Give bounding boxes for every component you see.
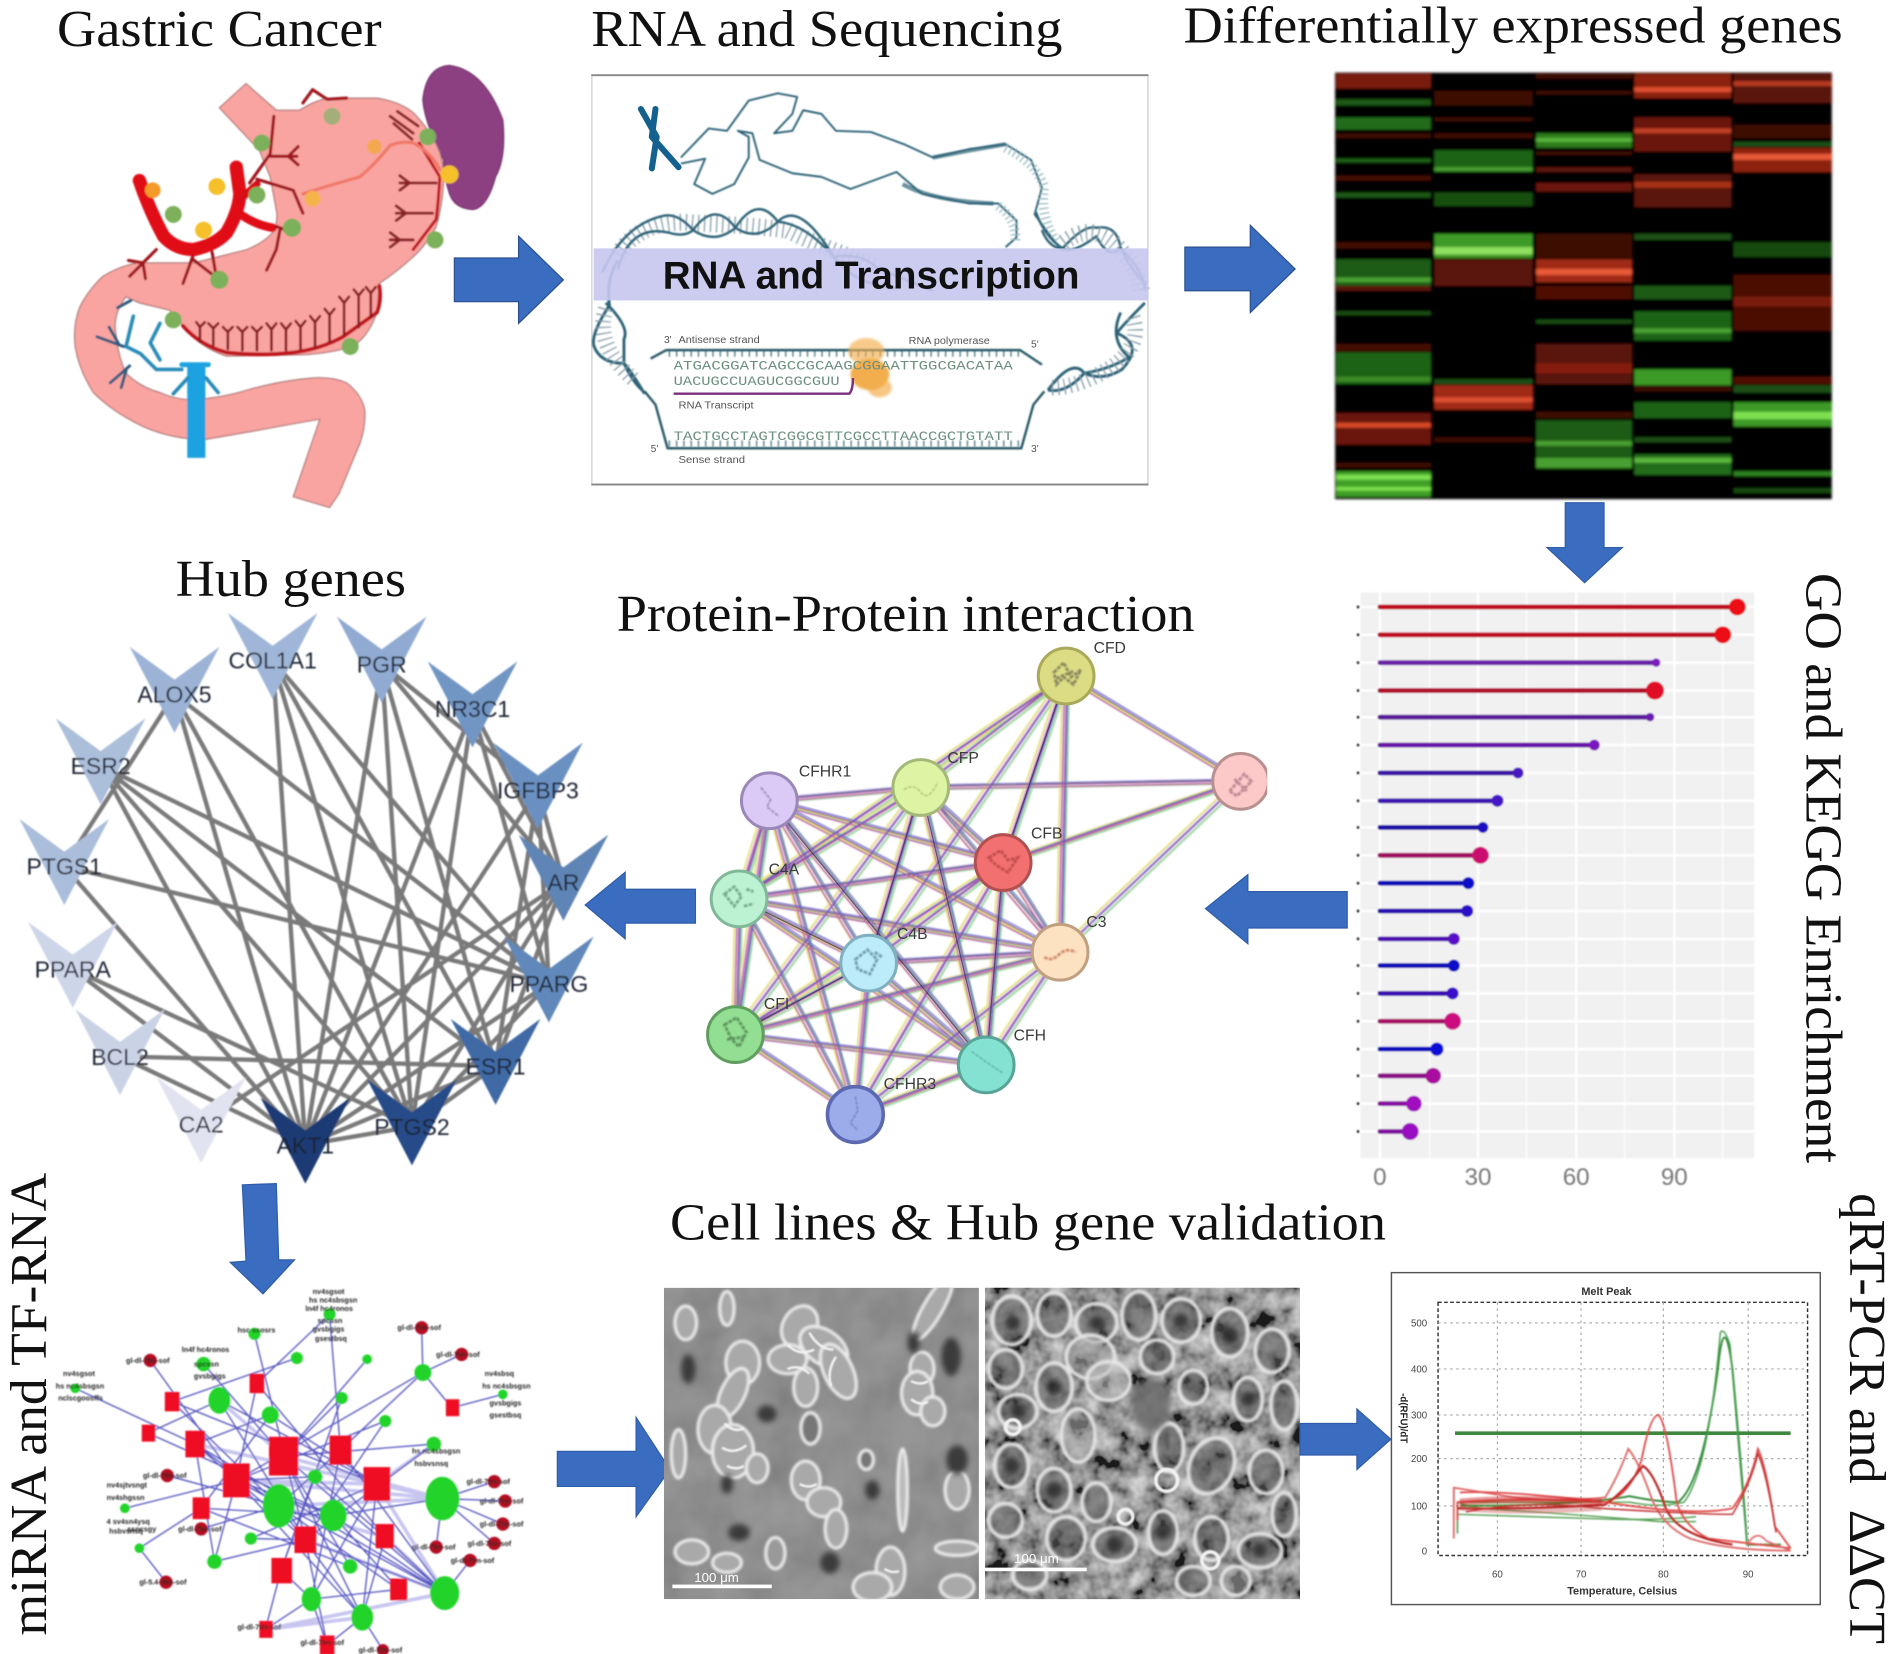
y axis labels: 400: [1411, 1365, 1428, 1376]
x axis labels: 60: [1492, 1569, 1503, 1580]
node labels: CFB: [1031, 825, 1063, 842]
node labels: gvsbgigs: [489, 1398, 521, 1407]
scale bar: 100 μm: [1014, 1551, 1059, 1566]
x axis labels: [1492, 1569, 1754, 1597]
y axis labels: [1398, 1319, 1428, 1557]
cells: [671, 1272, 979, 1602]
icon: red arteries: [128, 90, 440, 354]
node labels: nv4sbsq: [485, 1369, 514, 1378]
node labels: gvsbgigs: [194, 1372, 226, 1381]
node labels: hs nc4sbsgsn: [412, 1447, 460, 1456]
node labels: nv4sjtvsngt: [107, 1481, 148, 1490]
node labels: nv4sgsot: [313, 1287, 345, 1296]
chart: protein-protein interaction network: [708, 640, 1284, 1142]
node glyphs: [725, 663, 1251, 1130]
chart: miRNA and TF-RNA network: [56, 1287, 531, 1654]
title: miRNA and TF-RNA: miRNA and TF-RNA: [1, 1172, 58, 1635]
arrow: RNA to heatmap: [1185, 225, 1295, 313]
icon: chromosome: [641, 109, 678, 168]
node: CFP: [893, 760, 949, 815]
axis labels: 90: [1661, 1164, 1688, 1191]
y axis labels: -d(RFU)/dT: [1398, 1393, 1409, 1443]
arrow: stomach to RNA: [454, 236, 563, 323]
chart: hub gene network: [19, 613, 608, 1184]
hub gene labels: BCL2: [91, 1044, 149, 1070]
text: strand annotations: UACUGCCUAGUCGGCGUU: [674, 374, 840, 389]
node labels: gsestbsq: [315, 1334, 347, 1343]
node labels: hs nc4sbsgsn: [482, 1381, 531, 1390]
axis labels: [1373, 1164, 1688, 1191]
axis labels: 30: [1465, 1164, 1492, 1191]
node labels: C3: [1086, 914, 1107, 931]
panel: cell line micrograph right: [985, 1288, 1300, 1599]
arrow: cell lines to qRT-PCR: [1300, 1409, 1391, 1469]
node labels: [56, 1287, 531, 1654]
x axis labels: 70: [1576, 1569, 1587, 1580]
panel: heatmap: [1335, 73, 1832, 499]
x axis labels: 80: [1658, 1569, 1669, 1580]
arrow: miRNA network to cell lines: [557, 1417, 670, 1517]
node labels: gl-dl-7lm-sof: [412, 1542, 456, 1551]
text: strand annotations: Sense strand: [678, 455, 745, 466]
hub gene labels: IGFBP3: [497, 777, 579, 803]
node labels: gl-dl-7lm-sof: [143, 1471, 187, 1480]
hub gene labels: PPARG: [509, 971, 588, 997]
node labels: gl-dl-7lm-sof: [480, 1496, 524, 1505]
node labels: nclscgoosffs: [58, 1393, 103, 1402]
y axis labels: 500: [1411, 1319, 1428, 1330]
node labels: spcssn: [317, 1316, 342, 1325]
x axis labels: 90: [1743, 1569, 1754, 1580]
hub gene labels: PGR: [357, 651, 407, 677]
text: strand annotations: RNA polymerase: [909, 336, 990, 347]
axis labels: 0: [1373, 1164, 1387, 1191]
node: C3: [1032, 924, 1088, 980]
bright internal texture: [722, 1333, 928, 1572]
hub gene labels: ESR1: [466, 1054, 526, 1080]
title: Cell lines and hub gene validation: Cell lines & Hub gene validation: [670, 1194, 1386, 1251]
node: C4A: [711, 871, 767, 927]
node labels: gl-dl-7lm-sof: [480, 1519, 524, 1528]
text: strand annotations: Antisense strand: [678, 335, 760, 346]
hub gene labels: PTGS2: [374, 1114, 450, 1140]
hub gene labels: CA2: [179, 1112, 224, 1138]
bright ring cells: [1006, 1420, 1219, 1569]
title: RNA and Sequencing: RNA and Sequencing: [591, 1, 1063, 58]
hub gene labels: PTGS1: [27, 854, 102, 880]
green TF nodes: [70, 1308, 508, 1631]
node: unnamed pink: [1213, 754, 1268, 809]
hub gene labels: ESR2: [71, 753, 131, 779]
node labels: nv4shgssn: [107, 1493, 145, 1502]
node labels: hs nc4sbsgsn: [309, 1295, 357, 1304]
chart title: Melt Peak: [1581, 1286, 1633, 1298]
y axis labels: 0: [1422, 1546, 1428, 1557]
x axis labels: Temperature, Celsius: [1567, 1585, 1677, 1597]
node labels: ssncsgy: [127, 1524, 156, 1533]
crop edge of network: [1267, 745, 1284, 830]
node labels: ln4f hc4ronos: [305, 1304, 353, 1313]
node labels: CFHR3: [884, 1076, 936, 1093]
node labels: gl-5.4-3lm-sof: [139, 1578, 187, 1587]
node labels: CFHR1: [799, 764, 851, 781]
dark areas and nuclei: [1003, 1313, 1267, 1558]
node labels: CFD: [1094, 640, 1126, 657]
hub gene labels: AR: [547, 869, 579, 895]
node labels: ln4f hc4ronos: [182, 1345, 229, 1354]
dark spots: [681, 1331, 968, 1574]
column 1: [1336, 74, 1431, 497]
node labels: gl-dl-7lm-sof: [301, 1638, 345, 1647]
hub gene labels: [27, 648, 588, 1158]
title: Protein-Protein interaction: Protein-Protein interaction: [617, 586, 1195, 643]
text: strand annotations: RNA Transcript: [678, 400, 754, 411]
node labels: gvsbgigs: [313, 1324, 344, 1333]
diagram: DNA strands: [593, 93, 1146, 448]
icon: RNA polymerase: [848, 338, 892, 397]
cells: [989, 1291, 1298, 1595]
node labels: [764, 640, 1126, 1093]
node labels: gl-dl-7lm-sof: [397, 1323, 442, 1332]
node labels: gl-dl-7lm-sof: [126, 1356, 170, 1365]
column 2: [1434, 91, 1533, 442]
node labels: gl-dl-7lm-sof: [238, 1622, 282, 1631]
y axis labels: 100: [1411, 1501, 1428, 1512]
arrow: hub genes to miRNA network: [230, 1184, 294, 1294]
node: CFD: [1038, 648, 1094, 704]
node labels: hs nc4sbsgsn: [56, 1381, 104, 1390]
hub network edges: [64, 660, 563, 1145]
node labels: hsbvsnsq: [414, 1459, 448, 1468]
node labels: CFI: [764, 996, 789, 1013]
arrow: heatmap to enrichment: [1547, 503, 1622, 583]
node: CFH: [958, 1037, 1014, 1093]
icon: lymph nodes: [165, 108, 443, 355]
strong dark edges: [735, 676, 1066, 1065]
chart: qRT-PCR melt peak: [1391, 1273, 1820, 1605]
node: CFHR1: [741, 773, 797, 829]
axis labels: 60: [1563, 1164, 1590, 1191]
melt curves: [1454, 1331, 1791, 1551]
text: strand annotations: 3': [1031, 444, 1039, 455]
icon: blue veins: [97, 300, 218, 458]
node labels: 4 sv4sn4ysq: [107, 1517, 150, 1526]
column 3: [1536, 74, 1632, 469]
arrow: enrichment to PPI: [1205, 875, 1347, 944]
node: CFHR3: [827, 1087, 883, 1142]
band: lavender: [594, 248, 1149, 300]
scale bar: 100 μm: [694, 1570, 739, 1585]
node labels: hsc ssosrs: [238, 1326, 275, 1335]
plot frame: [1438, 1302, 1808, 1556]
scale bar: [672, 1573, 772, 1588]
hub nodes: [228, 613, 317, 699]
red miRNA nodes: [142, 1374, 459, 1654]
column 5: [1734, 74, 1832, 493]
lollipop bars: [1380, 598, 1746, 1140]
node labels: gsestbsq: [489, 1410, 521, 1419]
text: strand annotations: [651, 335, 1039, 466]
threshold line: [1455, 1432, 1791, 1435]
node labels: gl-dl-7lm-sof: [178, 1524, 222, 1533]
node: CFB: [975, 835, 1031, 890]
column 4: [1634, 74, 1731, 475]
title: Gastric Cancer: Gastric Cancer: [57, 1, 382, 58]
node labels: CFP: [947, 750, 979, 767]
node labels: gl-dl-7lm-sof: [436, 1350, 480, 1359]
node labels: spcssn: [194, 1360, 219, 1369]
node: CFI: [708, 1007, 763, 1062]
axis ticks: [1357, 605, 1360, 1133]
hub gene labels: NR3C1: [435, 696, 510, 722]
text: strand annotations: 5': [651, 444, 658, 455]
hub gene labels: AKT1: [277, 1132, 334, 1158]
text: strand annotations: 3': [664, 335, 672, 346]
hub gene labels: PPARA: [35, 957, 112, 983]
network edges: [195, 1400, 445, 1629]
node labels: gl-dl-7lm-sof: [451, 1556, 495, 1565]
node labels: nv4sgsot: [63, 1369, 95, 1378]
title: GO and KEGG Enrichment: GO and KEGG Enrichment: [1794, 573, 1851, 1164]
node labels: gl-dl-7lm-sof: [468, 1539, 512, 1548]
label: RNA and Transcription: RNA and Transcription: [663, 254, 1079, 297]
chart: GO and KEGG lollipop: [1357, 592, 1754, 1191]
node labels: hsbvsnsq: [109, 1527, 143, 1536]
panel: stomach illustration: [75, 65, 504, 508]
hub gene labels: ALOX5: [137, 682, 212, 708]
icon: stomach and duodenum: [75, 84, 444, 508]
arrow: PPI to hub genes: [585, 872, 695, 939]
panel: cell line micrograph left: [664, 1272, 979, 1602]
scale bar: [985, 1554, 1087, 1572]
title: Hub genes: Hub genes: [176, 551, 406, 608]
text: strand annotations: ATGACGGATCAGCCGCAAGCGGAATTGGCGACATAA: [674, 358, 1013, 373]
node labels: gl-dl-7lm-sof: [466, 1477, 511, 1486]
node: C4B: [841, 935, 897, 991]
y axis labels: 300: [1411, 1411, 1428, 1422]
node labels: C4B: [897, 926, 928, 943]
text: strand annotations: TACTGCCTAGTCGGCGTTCGCCTTAACCGCTGTATT: [674, 429, 1013, 444]
node labels: C4A: [769, 862, 800, 879]
panel: RNA and transcription: [591, 75, 1149, 485]
node labels: CFH: [1014, 1028, 1046, 1045]
hub gene labels: COL1A1: [229, 648, 317, 674]
text: strand annotations: 5': [1031, 340, 1039, 351]
y axis labels: 200: [1411, 1454, 1428, 1465]
icon: spleen: [423, 65, 504, 210]
